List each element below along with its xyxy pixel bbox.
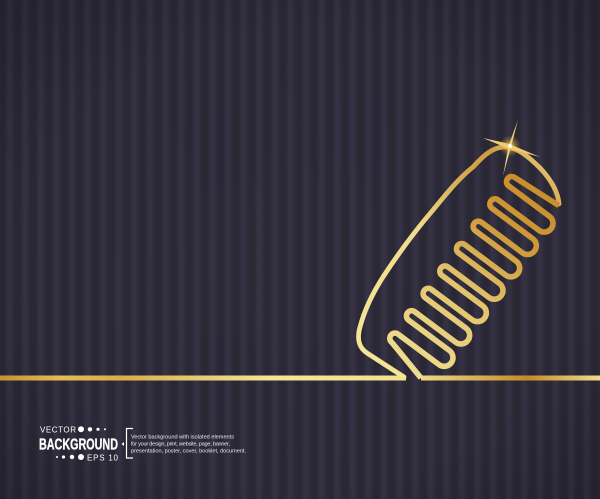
description text xyxy=(131,435,246,454)
description text: for your design, print, website, page, banner, xyxy=(131,442,230,448)
label: BACKGROUND: BACKGROUND xyxy=(39,436,118,454)
icon: sparkle xyxy=(483,120,540,176)
icon: dots top row xyxy=(78,426,106,432)
icon: dots bottom row xyxy=(56,454,84,460)
icon: comb teeth xyxy=(381,171,565,387)
logo: vector background badge xyxy=(39,426,246,462)
label: EPS 10: EPS 10 xyxy=(87,454,119,462)
icon: bracket xyxy=(122,428,133,458)
icon: comb outline xyxy=(358,147,559,377)
horizontal gold line xyxy=(0,376,600,380)
label: VECTOR: VECTOR xyxy=(40,426,76,434)
description text: Vector background with isolated elements xyxy=(131,435,234,441)
description text: presentation, poster, cover, booklet, document. xyxy=(131,448,246,454)
